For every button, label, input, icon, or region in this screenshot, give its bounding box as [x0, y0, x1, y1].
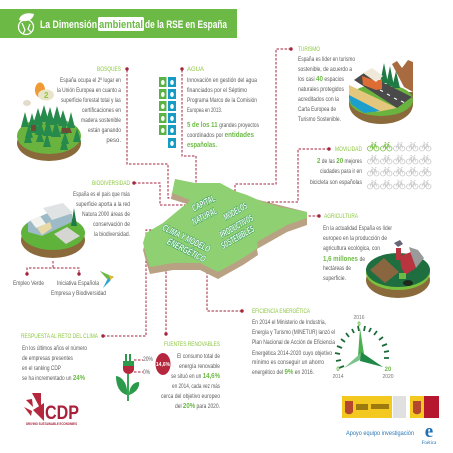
- icon: leaf badge with 2: 2: [44, 91, 49, 100]
- text: agricultura: [323, 226, 392, 282]
- text: bosques: superficie forestal total y las: [61, 98, 121, 104]
- sub-label: iniciativa española: Iniciativa Española: [57, 281, 100, 287]
- heading: turismo: TURISMO: [298, 47, 320, 53]
- text: eficiencia: mínimo es conseguir un ahorro: [252, 360, 325, 366]
- logos: ministerio: [342, 396, 439, 418]
- header banner: [0, 9, 237, 38]
- text: agricultura: hectáreas de: [323, 266, 352, 272]
- header banner: de la RSE en España: [145, 19, 228, 31]
- text: bosques: madera sostenible: [81, 118, 122, 124]
- text: agricultura: En la actualidad España es líder: [323, 226, 392, 232]
- text: agua: [187, 78, 258, 114]
- text: respuesta: de empresas presentes: [22, 356, 73, 362]
- text: turismo: Carta Europea de: [298, 107, 337, 113]
- heading: fuentes renovables: FUENTES RENOVABLES: [164, 342, 220, 348]
- text: turismo: acreditados con la: [298, 97, 340, 103]
- heading: eficiencia: EFICIENCIA ENERGÉTICA: [252, 308, 310, 315]
- text: biodiversidad: [73, 192, 131, 238]
- text: bosques: [57, 77, 122, 144]
- text: eficiencia: En 2014 el Ministerio de Industria,: [252, 320, 326, 326]
- text: agua: Programa Marco de la Comisión: [187, 98, 257, 104]
- text: eficiencia: energético del 9% en 2016.: [252, 367, 314, 376]
- text: turismo: naturales protegidos: [298, 87, 344, 93]
- icon: forest island: [17, 105, 81, 161]
- text: bosques: la Unión Europea en cuanto a: [57, 88, 122, 94]
- icon: farm island: [366, 240, 430, 298]
- map label: capital natural: NATURAL: [190, 206, 219, 228]
- map of Spain: [143, 179, 307, 279]
- map label: modelos productivos sostenibles: [218, 200, 257, 252]
- chart: gauge: 9: [357, 322, 361, 328]
- header banner: ambiental: [99, 19, 143, 31]
- map label: clima y modelo energetico: ENERGÉTICO: [165, 236, 208, 265]
- text: fuentes renovables: [161, 354, 221, 410]
- callout: agua: 5 de los 11 grandes proyectos: [187, 120, 259, 129]
- text: agricultura: superficie.: [323, 276, 346, 282]
- text: turismo: [298, 57, 356, 123]
- water drop pictogram: [159, 77, 176, 148]
- text: agricultura: agricultura ecológica, con: [323, 246, 380, 252]
- chart: gauge: 2020: [382, 374, 394, 380]
- text: respuesta: En los últimos años el número: [22, 346, 88, 352]
- text: movilidad: [310, 156, 362, 186]
- gauge labels: [143, 357, 154, 376]
- text: fuentes renovables: El consumo total de: [177, 354, 221, 360]
- text: eficiencia: Energética 2014-2020 cuyo objetivo: [252, 351, 333, 357]
- text: biodiversidad: Natura 2000 áreas de: [82, 212, 131, 218]
- panel: eficiencia energetica: [252, 308, 394, 380]
- text: bosques: están ganando: [88, 128, 122, 134]
- text: agricultura: europeo en la producción de: [323, 236, 388, 242]
- text: fuentes renovables: se situó en un 14,6%: [171, 371, 220, 380]
- heading: bosques: BOSQUES: [97, 67, 121, 73]
- map label: capital natural: CAPITAL: [190, 193, 218, 214]
- text: movilidad: ciudades para ir en: [320, 169, 362, 175]
- heading: respuesta: RESPUESTA AL RETO DEL CLIMA: [21, 334, 98, 340]
- panel: biodiversidad: [13, 181, 131, 297]
- logo: foetica: e: [425, 421, 433, 442]
- chart: gauge: [332, 315, 394, 380]
- logo: CDP: DRIVING SUSTAINABLE ECONOMIES: [26, 422, 78, 426]
- chart: gauge: 2014: [332, 374, 344, 380]
- text: bosques: España ocupa el 2º lugar en: [60, 77, 121, 84]
- panel: bosques: [17, 67, 122, 161]
- heading: movilidad: MOVILIDAD: [335, 147, 363, 153]
- text: agua: Innovación en gestión del agua: [187, 78, 258, 84]
- text: movilidad: bicicleta son españolas: [310, 180, 362, 186]
- text: fuentes renovables: cerca del objetivo europeo: [161, 394, 221, 400]
- gauge labels: 20%: [143, 357, 154, 363]
- badge: 14,6%: 14,6%: [156, 362, 171, 368]
- text: biodiversidad: España es el país que más: [73, 192, 130, 198]
- text: eficiencia: Energía y Turismo (MINETUR) lanzó el: [252, 330, 335, 336]
- panel: fuentes renovables: [116, 342, 221, 410]
- text: apoyo equipo investigacion: Apoyo equipo investigación: [346, 430, 414, 437]
- icon: bird logo: [100, 271, 114, 288]
- text: fuentes renovables: del 20% para 2020.: [175, 401, 220, 410]
- chart: gauge: 2016: [353, 315, 365, 321]
- text: respuesta: [22, 346, 88, 382]
- map label: capital natural: [190, 193, 219, 228]
- map label: clima y modelo energetico: [160, 222, 212, 265]
- chart: gauge: 0: [336, 367, 340, 373]
- logo: foetica: [422, 421, 437, 446]
- panel: agua: [159, 67, 259, 149]
- text: agua: financiados por el Séptimo: [187, 88, 248, 94]
- text: biodiversidad: conservación de: [93, 222, 131, 228]
- heading: agua: AGUA: [187, 67, 204, 73]
- logo: CDP: CDP: [45, 403, 79, 424]
- sub-label: iniciativa española: [51, 281, 106, 297]
- text: biodiversidad: la biodiversidad.: [94, 232, 130, 238]
- gauge labels: 0%: [143, 370, 151, 376]
- text: turismo: los casi 40 espacios: [298, 74, 344, 83]
- map label: modelos productivos sostenibles: PRODUCTIVOS: [218, 213, 256, 241]
- map label: clima y modelo energetico: CLIMA Y MODELO: [160, 222, 212, 255]
- logo: CDP: [24, 393, 79, 426]
- text: respuesta: en el ranking CDP: [22, 366, 61, 372]
- text: respuesta: se ha incrementado un 24%: [22, 373, 85, 382]
- text: agricultura: 1,6 millones de: [323, 254, 366, 263]
- panel: turismo: [298, 47, 413, 124]
- text: fuentes renovables: en 2014, cada vez más: [172, 384, 220, 390]
- icon: plug plant: [116, 354, 143, 401]
- sub-label: iniciativa española: Empresa y Biodiversidad: [51, 291, 106, 297]
- text: eficiencia: Plan Nacional de Acción de Eficiencia: [252, 340, 336, 346]
- callout: agua: coordinados por entidades: [187, 130, 254, 139]
- map label: modelos productivos sostenibles: MODELOS: [222, 200, 250, 223]
- chart: gauge: 20: [385, 367, 392, 373]
- callout: agua: españolas.: [187, 140, 217, 149]
- callout: agua: [187, 120, 259, 149]
- bicycle pictogram: [368, 142, 431, 189]
- panel: respuesta al reto del clima: [21, 334, 98, 426]
- panel: movilidad: [310, 142, 431, 189]
- logo: foetica: Foética: [422, 441, 437, 446]
- text: eficiencia: [252, 320, 336, 376]
- text: biodiversidad: superficie aporta a la red: [76, 202, 130, 208]
- text: turismo: España es líder en turismo: [298, 57, 356, 63]
- text: turismo: sostenible, de acuerdo a: [298, 67, 353, 73]
- panel: agricultura: [323, 214, 430, 298]
- text: bosques: peso.: [106, 138, 121, 144]
- text: turismo: Turismo Sostenible.: [298, 117, 341, 123]
- heading: biodiversidad: BIODIVERSIDAD: [92, 181, 131, 187]
- text: fuentes renovables: energía renovable: [179, 364, 221, 370]
- text: agua: Europea en 2013.: [187, 108, 222, 114]
- text: bosques: certificaciones en: [82, 108, 121, 114]
- heading: agricultura: AGRICULTURA: [324, 214, 358, 220]
- header banner: La Dimensión: [40, 19, 97, 31]
- connector lines: [25, 47, 331, 338]
- sub-label: empleo verde: Empleo Verde: [13, 281, 45, 287]
- icon: building island: [21, 203, 85, 258]
- text: movilidad: 2 de las 20 mejores: [317, 156, 362, 165]
- icon: road island: [349, 60, 413, 124]
- map label: modelos productivos sostenibles: SOSTENIBLES: [219, 224, 257, 252]
